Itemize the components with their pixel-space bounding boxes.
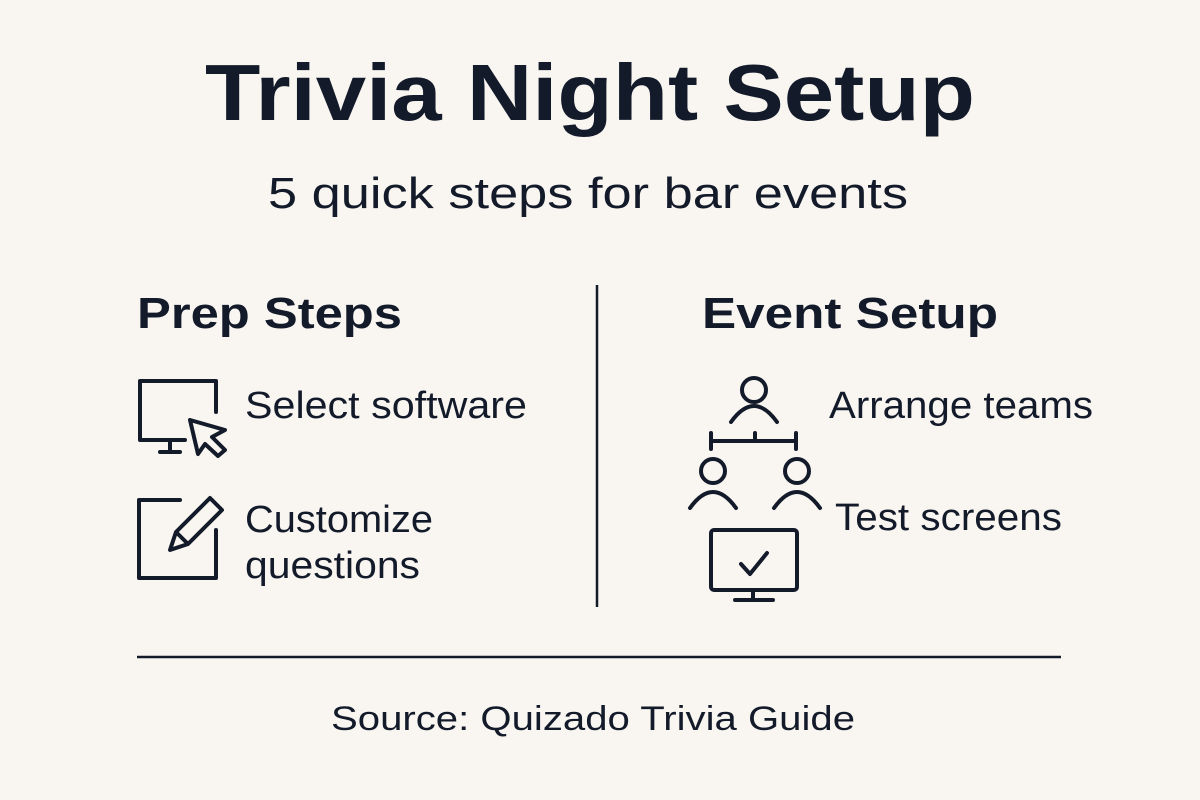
title: Trivia Night Setup: [205, 48, 975, 137]
text: arrange teams: Arrange teams: [829, 385, 1093, 427]
heading: prep steps: Prep Steps: [137, 289, 402, 338]
icon: monitor check: [711, 530, 797, 600]
panel: prep steps: [137, 289, 527, 587]
icon: teams hierarchy: [690, 378, 820, 508]
text: test screens: Test screens: [835, 497, 1062, 539]
source: Source: Quizado Trivia Guide: [331, 700, 855, 738]
panel: prep steps: questions: [245, 545, 420, 587]
text: customize questions: Customize: [245, 499, 433, 541]
text: select software: Select software: [245, 385, 527, 427]
subtitle: 5 quick steps for bar events: [268, 169, 908, 218]
icon: monitor with cursor: [140, 381, 225, 456]
panel: event setup: [690, 289, 1093, 600]
icon: pencil box: [139, 498, 222, 578]
heading: event setup: Event Setup: [702, 289, 998, 338]
